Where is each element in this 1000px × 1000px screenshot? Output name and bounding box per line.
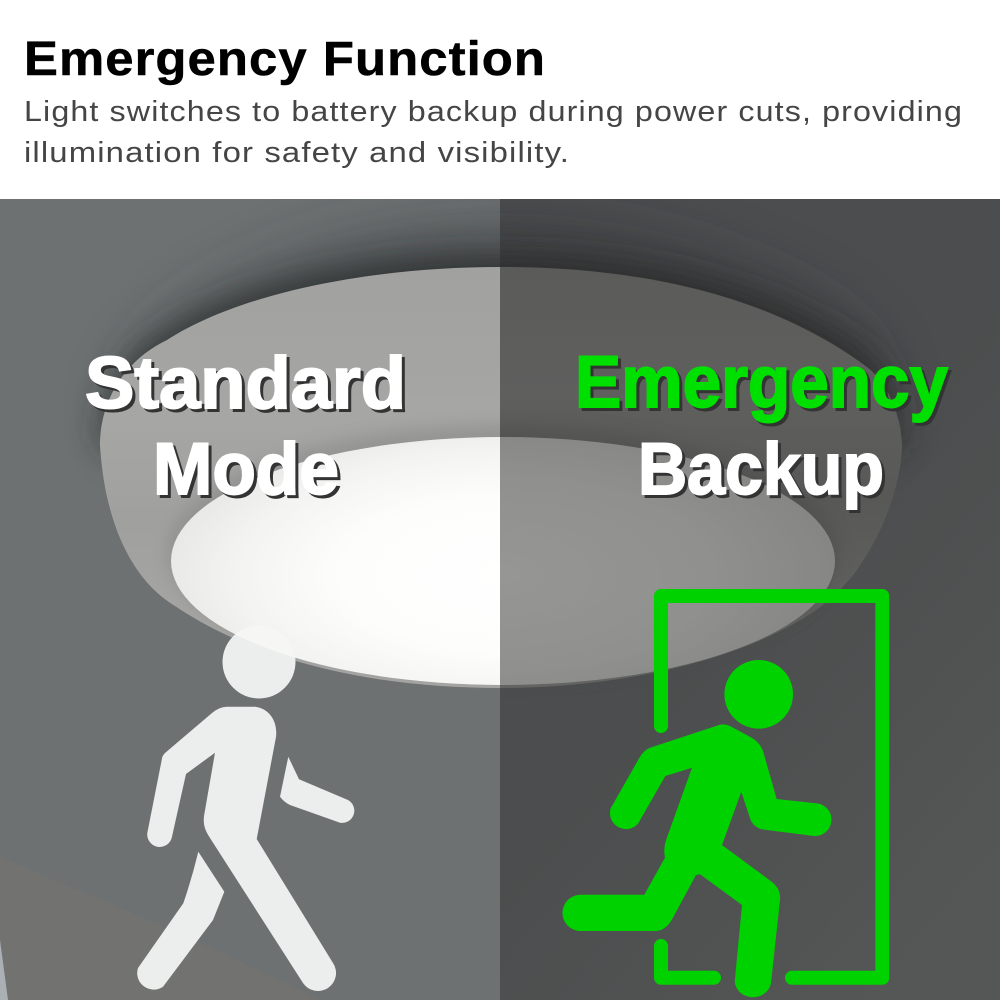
- icon: emergency exit runner: [562, 596, 882, 997]
- exit door frame: [661, 596, 882, 978]
- panel: emergency backup photo: [500, 199, 1000, 1000]
- description: illumination for safety and visibility.: [24, 137, 570, 169]
- dimmed light housing: [500, 267, 902, 688]
- description: [24, 96, 963, 169]
- glowing lens: [171, 437, 500, 685]
- icon: walking person: [137, 626, 354, 991]
- label: emergency backup: Emergency: [575, 342, 948, 423]
- label: standard mode: Standard: [85, 343, 406, 424]
- label: standard mode: [85, 343, 406, 510]
- label: emergency backup: Backup: [638, 429, 884, 510]
- dimmed lens: [500, 437, 835, 685]
- ceiling light housing: [100, 267, 500, 688]
- runner body: [562, 724, 831, 997]
- header: [24, 33, 963, 169]
- runner head: [724, 660, 793, 729]
- title: Emergency Function: [24, 33, 546, 86]
- label: emergency backup: [575, 342, 948, 510]
- label: standard mode: Mode: [153, 429, 339, 510]
- panel: standard mode photo: [0, 199, 500, 1000]
- description: Light switches to battery backup during power cuts, providing: [24, 96, 963, 128]
